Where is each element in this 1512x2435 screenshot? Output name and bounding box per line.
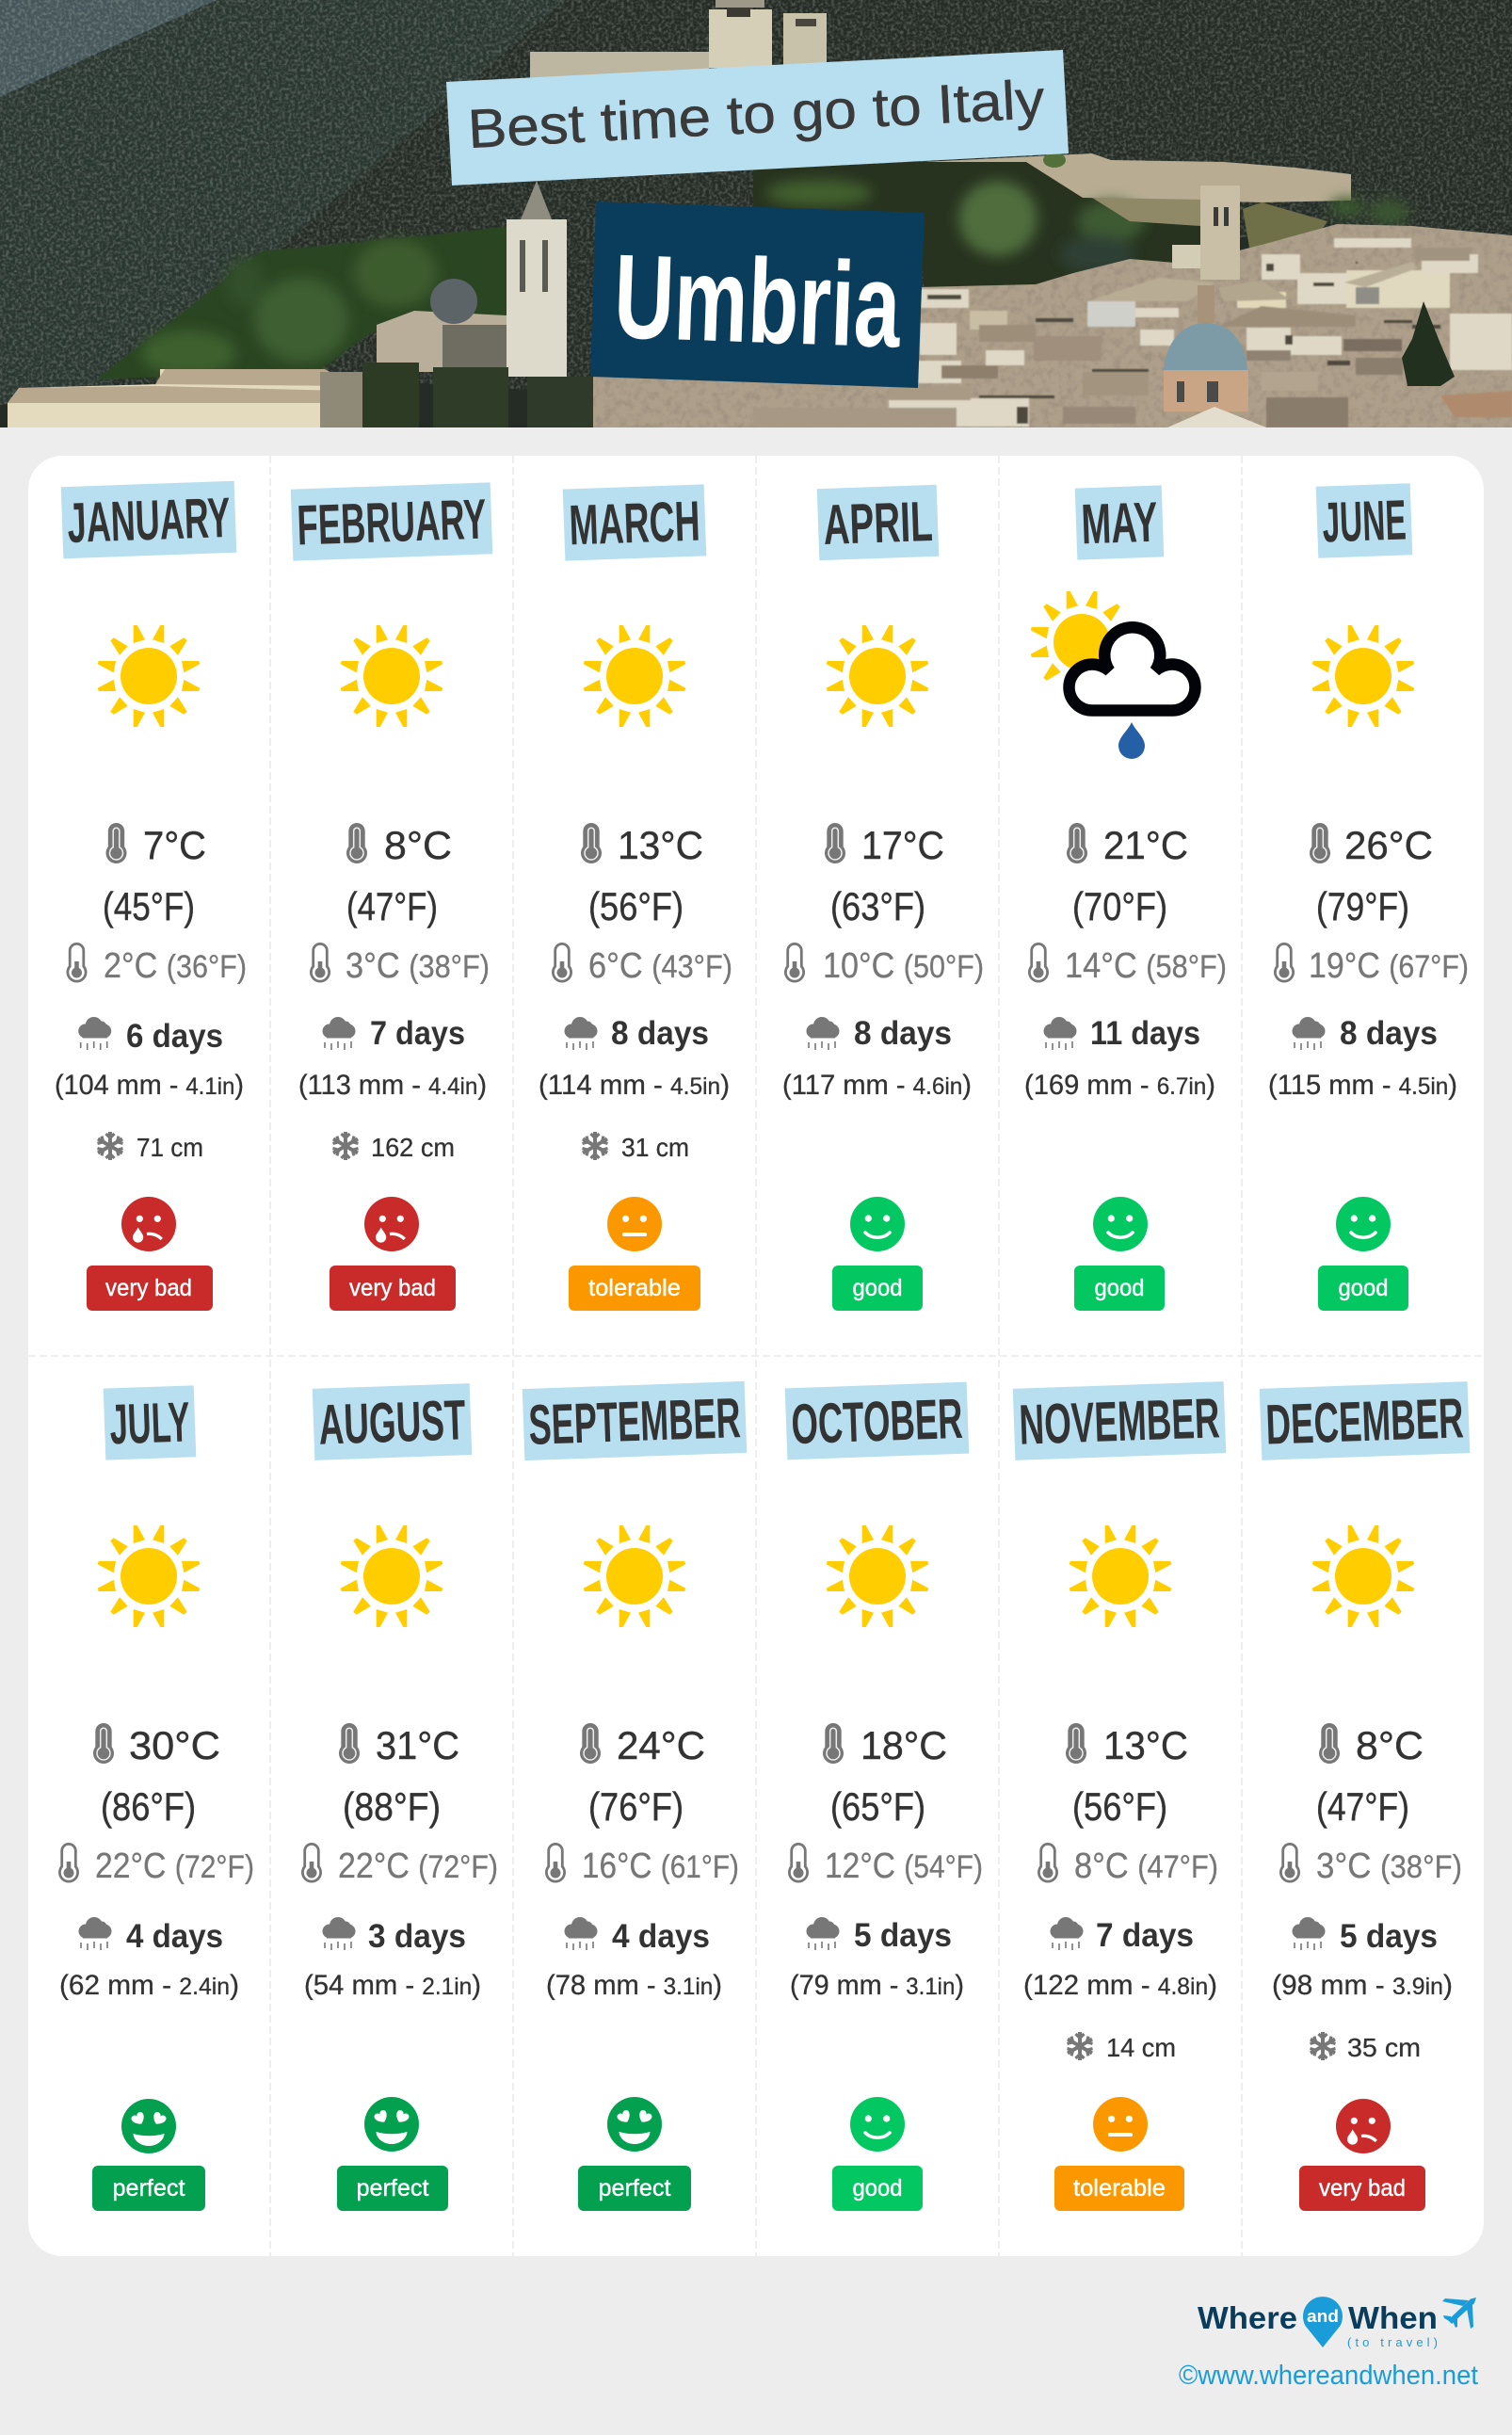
panel: January <box>55 481 247 1311</box>
rating: perfect <box>337 2097 448 2211</box>
icon: sun <box>98 625 200 727</box>
average temperature: (79°F) <box>1316 884 1409 928</box>
average temperature: 24°C <box>617 1723 705 1767</box>
rainfall: (98 mm - 3.9in) <box>1272 1970 1453 2001</box>
month heading <box>313 1383 472 1460</box>
rainfall <box>790 1917 964 2001</box>
minimum temperature: 22°C (72°F) <box>95 1846 254 1886</box>
average temperature: (56°F) <box>588 884 684 928</box>
rainfall <box>304 1917 481 2001</box>
rainfall: 4 days <box>126 1918 223 1955</box>
average temperature <box>825 823 944 928</box>
bottom left buildings <box>8 369 320 427</box>
snowfall <box>331 1132 455 1162</box>
rainfall <box>546 1917 722 2001</box>
minimum temperature: 14°C (58°F) <box>1065 946 1227 986</box>
panel: March <box>539 484 732 1311</box>
rating: very bad: very bad <box>105 1275 192 1301</box>
logo: Where and When to travel: (to travel) <box>1347 2335 1438 2349</box>
minimum temperature: 6°C (43°F) <box>588 946 732 986</box>
middle trees <box>753 162 1200 287</box>
panel: October <box>785 1382 983 2211</box>
logo: Where and When to travel: and <box>1307 2307 1339 2326</box>
town <box>593 224 1512 427</box>
average temperature: (76°F) <box>588 1784 684 1829</box>
month heading: APRIL <box>822 490 934 556</box>
average temperature <box>1066 1723 1188 1829</box>
month heading <box>61 481 236 558</box>
panel: August <box>302 1383 498 2211</box>
average temperature: 18°C <box>861 1723 947 1767</box>
rainfall: (114 mm - 4.5in) <box>539 1070 730 1101</box>
snowfall <box>1066 2032 1176 2062</box>
rainfall: (113 mm - 4.4in) <box>298 1070 487 1101</box>
panel: February <box>291 482 492 1311</box>
average temperature: (70°F) <box>1072 884 1167 928</box>
month heading <box>291 482 492 561</box>
rating: very bad: very bad <box>1319 2175 1406 2201</box>
rainfall <box>1272 1917 1453 2001</box>
rainfall <box>1268 1015 1457 1101</box>
average temperature: 31°C <box>376 1723 459 1767</box>
average temperature: (88°F) <box>343 1784 441 1829</box>
rainfall: (79 mm - 3.1in) <box>790 1970 964 2001</box>
rainfall: 4 days <box>612 1918 710 1955</box>
fortress wall <box>923 153 1351 202</box>
average temperature <box>103 823 206 928</box>
average temperature: 26°C <box>1344 823 1433 867</box>
rainfall: (169 mm - 6.7in) <box>1024 1070 1215 1101</box>
panel: calendar card <box>28 456 1484 2256</box>
icon: sun <box>827 1525 928 1627</box>
icon: sun <box>1312 1525 1414 1627</box>
month heading <box>1075 485 1164 560</box>
icon: sun behind rain cloud <box>1031 591 1196 759</box>
rating: tolerable <box>569 1197 700 1311</box>
month heading: MAY <box>1080 491 1159 556</box>
rainfall: 8 days <box>611 1015 709 1052</box>
icon: sun <box>98 1525 200 1627</box>
rating: good <box>832 1197 923 1311</box>
month heading: NOVEMBER <box>1018 1386 1221 1457</box>
month heading: OCTOBER <box>790 1387 964 1456</box>
average temperature: (45°F) <box>103 884 195 928</box>
minimum temperature: 22°C (72°F) <box>338 1846 498 1886</box>
month heading: JUNE <box>1321 488 1407 555</box>
month heading: JANUARY <box>66 486 232 555</box>
average temperature <box>1316 1723 1424 1829</box>
logo: Where and When to travel: Where <box>1198 2300 1297 2335</box>
rainfall <box>298 1015 487 1101</box>
panel: December <box>1260 1381 1470 2211</box>
website copyright: ©www.whereandwhen.net <box>1179 2361 1478 2391</box>
town square tower <box>1200 185 1240 280</box>
minimum temperature: 10°C (50°F) <box>823 946 984 986</box>
rainfall <box>59 1917 239 2001</box>
dark cypress <box>1402 301 1455 386</box>
minimum temperature: 19°C (67°F) <box>1309 946 1469 986</box>
average temperature: 13°C <box>618 823 703 867</box>
header photo: hillside town <box>0 0 1512 427</box>
rainfall: (78 mm - 3.1in) <box>546 1970 722 2001</box>
panel: April <box>782 485 984 1311</box>
roofs <box>887 249 1512 427</box>
average temperature: 21°C <box>1103 823 1188 867</box>
pale walls <box>889 238 1512 427</box>
average temperature: 13°C <box>1103 1723 1188 1767</box>
month heading <box>785 1382 969 1459</box>
snowfall <box>1309 2032 1421 2062</box>
average temperature <box>823 1723 947 1829</box>
rainfall <box>1024 1015 1215 1101</box>
rating: good <box>1074 1197 1165 1311</box>
rating: perfect: perfect <box>599 2175 671 2201</box>
month heading <box>523 1381 747 1460</box>
average temperature: 8°C <box>1356 1723 1424 1767</box>
icon: sun <box>1070 1525 1171 1627</box>
snowfall: 162 cm <box>371 1133 455 1162</box>
rating: very bad: very bad <box>349 1275 436 1301</box>
rainfall <box>1023 1917 1217 2001</box>
rating: good: good <box>853 1275 902 1301</box>
rainfall <box>782 1015 972 1101</box>
rating: good: good <box>1094 1275 1145 1301</box>
rainfall: (104 mm - 4.1in) <box>55 1070 244 1101</box>
logo: Where and When to travel: When <box>1348 2300 1438 2335</box>
icon: sun <box>827 625 928 727</box>
icon: sun <box>584 625 685 727</box>
left greenery <box>96 226 508 379</box>
panel: June <box>1268 483 1469 1311</box>
rainfall: 8 days <box>1340 1015 1438 1052</box>
average temperature: (47°F) <box>346 884 438 928</box>
average temperature <box>346 823 452 928</box>
rating: good: good <box>853 2175 902 2201</box>
logo: Where and When to travel <box>1198 2297 1476 2349</box>
rainfall: 5 days <box>854 1917 952 1954</box>
minimum temperature: 3°C (38°F) <box>1316 1846 1462 1886</box>
rainfall: 11 days <box>1090 1015 1200 1052</box>
minimum temperature: 3°C (38°F) <box>346 946 490 986</box>
minimum temperature: 16°C (61°F) <box>582 1846 739 1886</box>
month heading <box>1013 1381 1226 1460</box>
rating: good <box>832 2097 923 2211</box>
icon: sun <box>341 625 442 727</box>
rating: perfect: perfect <box>113 2175 185 2201</box>
snowfall: 14 cm <box>1106 2033 1176 2062</box>
average temperature: (65°F) <box>830 1784 925 1829</box>
fortress on the top <box>530 0 827 80</box>
rainfall <box>539 1015 730 1101</box>
panel: July <box>59 1385 254 2211</box>
panel: May <box>1024 485 1227 1311</box>
rainfall <box>55 1017 244 1101</box>
rating: very bad <box>1299 2099 1425 2211</box>
average temperature: (56°F) <box>1072 1784 1167 1829</box>
icon: plane <box>1442 2298 1476 2329</box>
title banner: Umbria <box>590 202 925 388</box>
average temperature: 30°C <box>129 1723 220 1767</box>
rainfall: 7 days <box>1096 1917 1194 1954</box>
minimum temperature: 2°C (36°F) <box>104 946 247 986</box>
snowfall: 35 cm <box>1347 2033 1421 2062</box>
rating: perfect <box>92 2099 205 2211</box>
rating: tolerable: tolerable <box>1073 2175 1166 2201</box>
rainfall: (62 mm - 2.4in) <box>59 1970 239 2001</box>
icon: sun <box>584 1525 685 1627</box>
month heading: SEPTEMBER <box>527 1386 742 1457</box>
average temperature <box>93 1723 220 1829</box>
rating: very bad <box>330 1197 456 1311</box>
rainfall: 5 days <box>1340 1918 1438 1955</box>
rating: perfect <box>578 2097 691 2211</box>
average temperature <box>339 1723 459 1829</box>
month heading: FEBRUARY <box>296 488 488 556</box>
rainfall: (122 mm - 4.8in) <box>1023 1970 1217 2001</box>
icon: location pin <box>1303 2297 1343 2347</box>
panel: September <box>523 1381 747 2211</box>
panel: November <box>1013 1381 1226 2211</box>
church nave and dome <box>377 311 507 372</box>
blue dome <box>1164 323 1247 370</box>
title banner: Umbria: Umbria <box>612 229 904 373</box>
average temperature <box>580 1723 705 1829</box>
month heading: MARCH <box>568 490 701 556</box>
rating: good <box>1318 1197 1408 1311</box>
rainfall: 8 days <box>854 1015 952 1052</box>
month heading: JULY <box>108 1391 191 1456</box>
snowfall <box>96 1132 203 1162</box>
month heading <box>1316 483 1412 558</box>
shadows and windows <box>927 262 1440 424</box>
average temperature: (63°F) <box>830 884 925 928</box>
month heading <box>104 1385 196 1460</box>
rainfall: (117 mm - 4.6in) <box>782 1070 972 1101</box>
average temperature: 8°C <box>384 823 452 867</box>
icon: sun <box>341 1525 442 1627</box>
average temperature: 17°C <box>861 823 944 867</box>
rating: very bad <box>87 1197 213 1311</box>
icon: sun <box>1312 625 1414 727</box>
rainfall: (54 mm - 2.1in) <box>304 1970 481 2001</box>
snowfall <box>581 1132 689 1162</box>
average temperature <box>581 823 703 928</box>
rating: tolerable: tolerable <box>588 1275 681 1301</box>
rating: tolerable <box>1054 2097 1184 2211</box>
rating: good: good <box>1339 1275 1388 1301</box>
average temperature <box>1067 823 1188 928</box>
rainfall: 7 days <box>370 1015 465 1052</box>
month heading <box>817 485 939 560</box>
tall church tower <box>521 181 552 219</box>
average temperature: (47°F) <box>1316 1784 1409 1829</box>
month heading: AUGUST <box>317 1388 467 1457</box>
minimum temperature: 12°C (54°F) <box>825 1846 983 1886</box>
month heading <box>563 484 706 561</box>
average temperature: (86°F) <box>101 1784 196 1829</box>
rainfall: 3 days <box>368 1918 466 1955</box>
title banner: Best time to go to Italy: Best time to go to Italy <box>466 69 1046 160</box>
rainfall: 6 days <box>126 1018 223 1055</box>
average temperature <box>1310 823 1433 928</box>
title banner: Best time to go to Italy <box>446 50 1069 185</box>
rating: perfect: perfect <box>356 2175 429 2201</box>
snowfall: 31 cm <box>621 1133 689 1162</box>
rainfall: (115 mm - 4.5in) <box>1268 1070 1457 1101</box>
snowfall: 71 cm <box>137 1133 203 1162</box>
minimum temperature: 8°C (47°F) <box>1074 1846 1218 1886</box>
average temperature: 7°C <box>143 823 206 867</box>
